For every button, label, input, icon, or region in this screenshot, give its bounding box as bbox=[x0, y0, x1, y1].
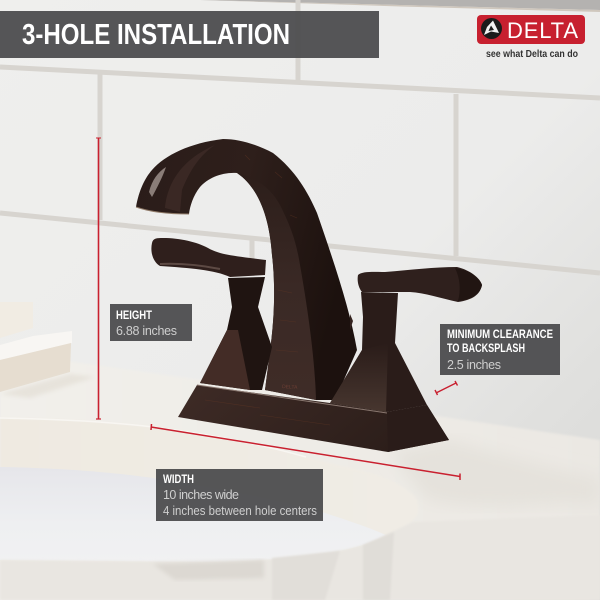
clearance dimension line bbox=[435, 381, 458, 395]
spout front face bbox=[237, 173, 316, 400]
Delta logo bbox=[477, 15, 585, 60]
counter reflection bbox=[0, 515, 600, 600]
clearance callout bbox=[440, 324, 560, 375]
width callout: 4 inches between hole centers bbox=[163, 504, 317, 518]
faucet rust streaks bbox=[205, 155, 330, 425]
height callout: HEIGHT bbox=[116, 308, 153, 322]
height callout: 6.88 inches bbox=[116, 324, 177, 338]
faucet etched brand: DELTA bbox=[282, 384, 298, 391]
right stem bbox=[330, 292, 427, 412]
left stem bbox=[200, 277, 272, 390]
sink basin bbox=[0, 467, 386, 562]
faucet base plate bbox=[178, 385, 449, 452]
width callout: 10 inches wide bbox=[163, 488, 239, 502]
width callout: WIDTH bbox=[163, 472, 194, 486]
spout bbox=[136, 139, 357, 400]
clearance callout: 2.5 inches bbox=[447, 358, 501, 372]
width dimension line bbox=[151, 424, 460, 480]
title banner bbox=[0, 11, 379, 58]
soap dish bbox=[0, 302, 95, 398]
countertop bbox=[0, 345, 600, 600]
icon: delta mark bbox=[481, 18, 502, 39]
clearance callout: MINIMUM CLEARANCE bbox=[447, 327, 553, 341]
height dimension line bbox=[96, 138, 101, 419]
Delta logo: DELTA bbox=[507, 18, 578, 43]
clearance callout: TO BACKSPLASH bbox=[447, 341, 525, 355]
faucet bbox=[136, 139, 482, 452]
left handle bbox=[151, 238, 266, 277]
Delta logo: see what Delta can do bbox=[486, 49, 578, 60]
height callout bbox=[110, 304, 192, 341]
back lever nub bbox=[350, 314, 353, 330]
spout highlight bbox=[149, 167, 166, 197]
title banner: 3-HOLE INSTALLATION bbox=[22, 19, 290, 51]
width callout bbox=[156, 469, 323, 521]
right handle bbox=[358, 267, 482, 302]
